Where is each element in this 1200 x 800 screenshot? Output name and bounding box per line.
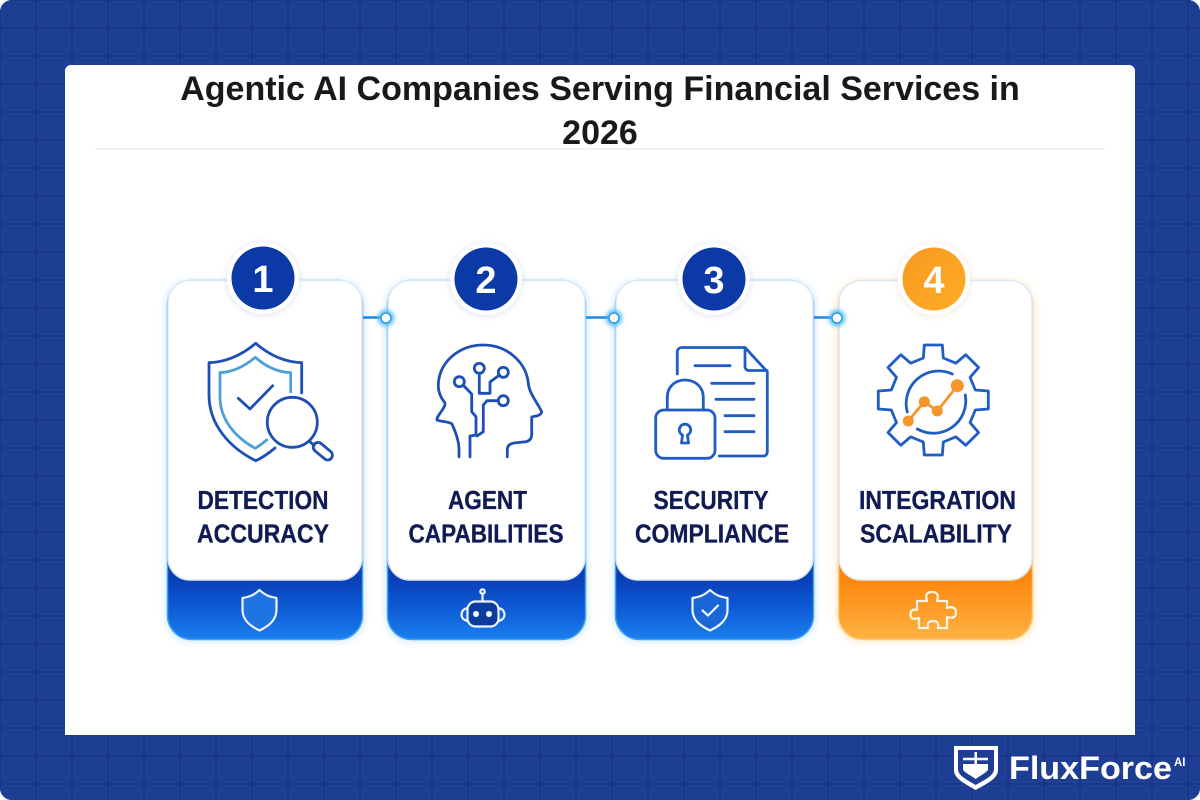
title: 2026 xyxy=(562,114,638,152)
icon: shield with magnifier xyxy=(209,343,334,462)
label: SECURITY xyxy=(654,487,768,515)
label xyxy=(197,487,329,548)
label: INTEGRATION xyxy=(859,487,1016,515)
icon: footer puzzle piece xyxy=(910,592,956,628)
label xyxy=(635,487,789,548)
title xyxy=(180,70,1020,152)
icon: footer shield check xyxy=(692,590,728,630)
number badge 1: 1 xyxy=(252,259,274,301)
connector 1 to 2 xyxy=(363,310,394,326)
icon: document and lock xyxy=(656,348,767,458)
label: SCALABILITY xyxy=(860,520,1012,548)
logo: FluxForce AI xyxy=(954,746,1186,790)
label: ACCURACY xyxy=(197,520,329,548)
number badge 3: 3 xyxy=(703,260,725,302)
connector 2 to 3 xyxy=(586,310,622,326)
logo: FluxForce AI: FluxForce xyxy=(1009,750,1172,786)
logo: FluxForce AI: AI xyxy=(1174,757,1186,769)
white content panel xyxy=(65,65,1135,735)
number badge 4: 4 xyxy=(923,260,945,302)
icon: gear with growth chart xyxy=(878,345,988,455)
panel: card 3 security compliance xyxy=(612,242,817,643)
number badge 4 xyxy=(896,242,972,318)
panel: card 1 detection accuracy xyxy=(164,241,366,643)
label: AGENT xyxy=(448,487,527,515)
title: Agentic AI Companies Serving Financial Services in xyxy=(180,70,1020,108)
icon: footer shield xyxy=(242,590,276,630)
number badge 2 xyxy=(448,242,524,318)
number badge 3 xyxy=(676,242,752,318)
connector 3 to 4 xyxy=(814,310,845,326)
label xyxy=(859,487,1016,548)
panel: card 2 agent capabilities xyxy=(384,242,589,643)
number badge 1 xyxy=(225,241,301,317)
icon: logo shield xyxy=(954,746,998,790)
panel: card 4 integration scalability xyxy=(835,242,1036,643)
icon: footer robot xyxy=(462,589,504,626)
label: COMPLIANCE xyxy=(635,520,789,548)
number badge 2: 2 xyxy=(475,260,497,302)
label: DETECTION xyxy=(198,487,328,515)
icon: AI head xyxy=(437,345,542,457)
label xyxy=(408,487,564,548)
label: CAPABILITIES xyxy=(408,520,564,548)
